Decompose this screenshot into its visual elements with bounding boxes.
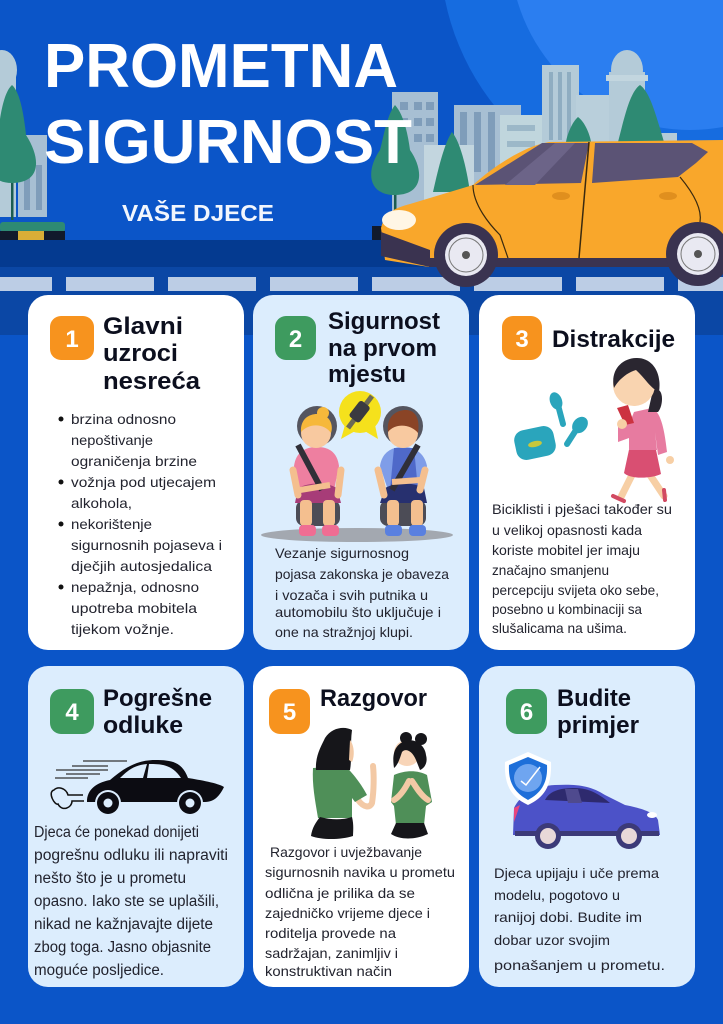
text block 6: ponašanjem u prometu. [494,957,665,973]
heading 4: Pogrešne [103,685,212,712]
heading 4 [103,685,212,739]
text block 4: Djeca će ponekad donijeti [34,824,199,841]
badge 3: 3 [515,326,529,353]
heading 2: Sigurnost [328,308,440,335]
text block 3: slušalicama na ušima. [492,620,627,636]
badge 3 [502,316,542,360]
badge 2 [275,316,316,360]
bullet list text: vožnja pod utjecajem [71,474,216,490]
badge 5 [269,689,310,734]
title [44,32,412,177]
road [0,240,723,335]
text block 5: odlična je prilika da se [265,885,415,901]
heading 6: Budite [557,685,631,712]
badge 6 [506,689,547,734]
panel: card 1 causes [28,295,244,650]
heading 6: primjer [557,712,639,739]
badge 2: 2 [289,326,302,353]
text block 3: Biciklisti i pješaci također su [492,501,672,517]
text block 4 [34,824,228,979]
icon: earbuds [512,390,591,462]
bullet list text: alkohola, [71,495,132,511]
heading 1: Glavni [103,313,183,340]
text block 5 [265,844,455,979]
text block 6: dobar uzor svojim [494,932,610,948]
bullet list text: sigurnosnih pojaseva i [71,537,222,553]
badge 4 [50,689,94,734]
text block 6: Djeca upijaju i uče prema [494,865,659,881]
panel: card 5 conversation [253,666,469,987]
heading 2: na prvom [328,335,437,362]
text block 2 [275,545,449,640]
subtitle: VAŠE DJECE [122,199,274,226]
badge 6: 6 [520,699,533,726]
bullet list text: brzina odnosno [71,411,176,427]
badge 4: 4 [65,699,79,726]
title: SIGURNOST [44,108,412,177]
text block 5: zajedničko vrijeme djece i [265,905,430,921]
heading 5: Razgovor [320,685,427,712]
illustration: woman and child talking [311,728,432,839]
text block 2: one na stražnjoj klupi. [275,624,413,640]
bullet list text: upotreba mobitela [71,600,197,616]
text block 4: opasno. Iako ste se uplašili, [34,893,219,910]
text block 5: Razgovor i uvježbavanje [270,844,422,860]
panel: card 3 distractions [479,295,695,650]
heading 2: mjestu [328,361,406,388]
panel: card 2 safety first [253,295,469,650]
icon: seat belt bubble [339,391,381,439]
title: PROMETNA [44,32,398,101]
bullet list text [71,411,222,637]
illustration: seated children [261,406,453,542]
text block 5: sadržajan, zanimljiv i [265,945,398,961]
heading 1: nesreća [103,368,201,395]
bullet list text: dječjih autosjedalica [71,558,212,574]
heading 6 [557,685,639,739]
heading 1 [103,313,201,395]
text block 2: i vozača i svih putnika u [275,587,428,603]
text block 3: percepciju svijeta oko sebe, [492,582,659,598]
icon: blue car [513,785,660,849]
panel: card 4 wrong decisions [28,666,244,987]
bullet list text: nekorištenje [71,516,152,532]
panel: card 6 be an example [479,666,695,987]
text block 3: značajno smanjenu [492,562,609,578]
illustration: girl with phone [613,358,674,501]
bullet list text: tijekom vožnje. [71,621,174,637]
text block 5: sigurnosnih navika u prometu [265,864,455,880]
icon: shield with check [505,752,551,805]
heading 3: Distrakcije [552,326,675,353]
heading 2 [328,308,440,388]
text block 4: pogrešnu odluku ili napraviti [34,847,228,864]
bullet list text: ograničenja brzine [71,453,197,469]
text block 5: konstruktivan način [265,963,392,979]
heading 1: uzroci [103,340,178,367]
text block 3: u velikoj opasnosti kada [492,522,642,538]
text block 4: nešto što je u prometu [34,870,186,887]
icon: speeding black car [51,760,224,816]
city skyline right [392,50,677,240]
text block 5: roditelja provede na [265,925,396,941]
bullets [58,416,64,590]
text block 6: modelu, pogotovo u [494,887,620,903]
city and tree left [0,50,47,220]
text block 4: zbog toga. Jasno objasnite [34,939,211,956]
badge 1 [50,316,94,360]
badge 5: 5 [283,699,296,726]
bullet list text: nepažnja, odnosno [71,579,199,595]
bullet list text: nepoštivanje [71,432,153,448]
text block 4: nikad ne kažnjavajte dijete [34,916,213,933]
icon: yellow car [381,140,723,287]
text block 6: ranijoj dobi. Budite im [494,909,642,925]
trees right [371,85,664,210]
hedge and curb [0,222,392,241]
text block 4: moguće posljedice. [34,962,164,979]
text block 3: koriste mobitel jer imaju [492,542,640,558]
text block 6 [494,865,665,973]
text block 3: posebno u kombinaciji sa [492,601,642,617]
heading 4: odluke [103,712,183,739]
text block 2: Vezanje sigurnosnog [275,545,409,561]
text block 3 [492,501,672,636]
text block 2: pojasa zakonska je obaveza [275,566,449,582]
text block 2: automobilu što uključuje i [275,604,441,620]
badge 1: 1 [65,326,79,353]
